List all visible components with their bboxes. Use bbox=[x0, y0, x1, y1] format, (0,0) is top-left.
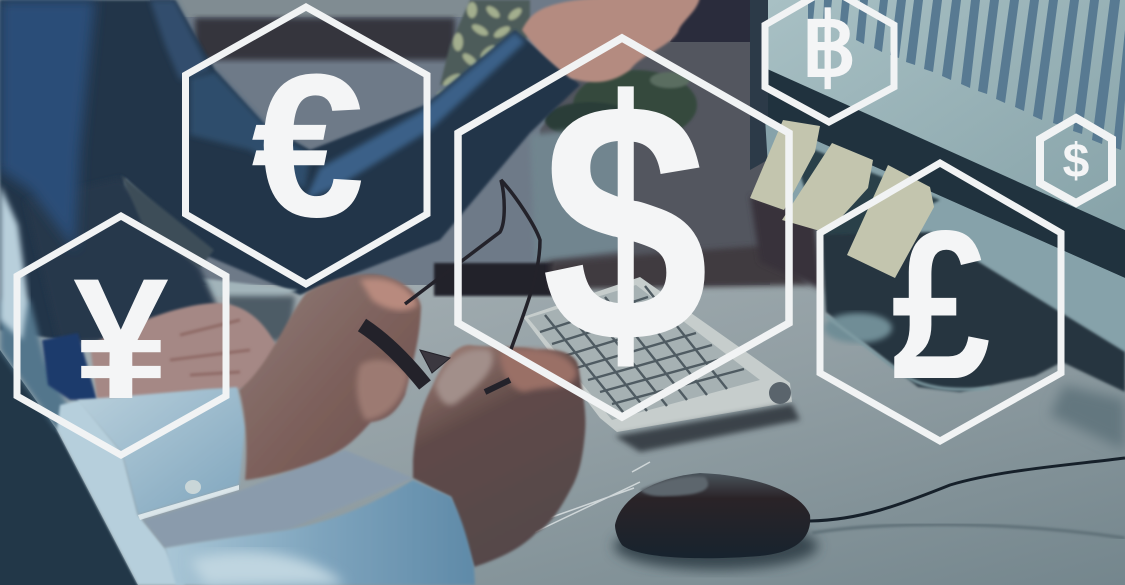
dark hip lower left bbox=[0, 350, 138, 585]
eyeglasses bbox=[362, 180, 540, 392]
grey chair triangle bbox=[121, 175, 214, 268]
small dollar symbol: $ bbox=[1063, 135, 1090, 188]
dark area beneath bezel bbox=[790, 140, 940, 240]
knuckle highlight on central hand bbox=[360, 278, 418, 310]
right desk dark wedge fade bbox=[1050, 385, 1125, 450]
finger shading on left hand bbox=[170, 320, 250, 375]
finger highlights on right hand bbox=[500, 349, 577, 392]
hexagon: pound bbox=[820, 163, 1061, 441]
yen symbol: ¥ bbox=[73, 243, 169, 435]
sweater torso under yen bbox=[25, 178, 230, 345]
hexagon: euro bbox=[186, 7, 427, 284]
fingers on central hand bbox=[357, 360, 408, 420]
monitor glass bbox=[768, 0, 1125, 240]
plant pot bbox=[530, 125, 630, 262]
mouse cable shadow bbox=[812, 525, 1125, 538]
dollar symbol: $ bbox=[541, 32, 709, 414]
wall top strip bbox=[170, 0, 470, 17]
far hand at top bbox=[522, 0, 700, 82]
shirt arm bbox=[0, 185, 28, 340]
sleeve highlight bbox=[190, 552, 345, 585]
keyboard shadow bbox=[615, 404, 800, 452]
area under monitor bbox=[765, 118, 1125, 380]
front sleeve bbox=[165, 480, 475, 585]
dark wall strip at top bbox=[670, 0, 770, 42]
monitor stand shadow bbox=[822, 232, 1125, 392]
dark wall shelf bbox=[195, 18, 455, 60]
wall shadow near notes bbox=[750, 195, 822, 290]
shadowed shelf to the right bbox=[550, 245, 810, 290]
front desk shadow bbox=[143, 450, 413, 548]
hexagon: yen bbox=[17, 216, 226, 455]
shirt cuff bbox=[77, 387, 245, 515]
monitor screen bars bbox=[808, 0, 1125, 150]
plant bbox=[436, 0, 697, 140]
cuff button bbox=[185, 480, 201, 494]
grey wall behind the large dollar bbox=[540, 40, 770, 265]
keyboard keys bbox=[528, 285, 760, 420]
monitor lower bezel bbox=[765, 68, 1125, 278]
hexagon: large dollar bbox=[458, 32, 789, 417]
cuff band bbox=[138, 485, 239, 520]
pound symbol: £ bbox=[891, 187, 991, 423]
hexagon: small dollar bbox=[1040, 118, 1112, 203]
central hand holding glasses bbox=[239, 274, 421, 480]
navy cuff of other arm bbox=[42, 333, 97, 400]
dark table edge bar bbox=[434, 263, 554, 296]
keyboard roller bbox=[769, 382, 791, 404]
dark sweater torso bbox=[0, 0, 580, 340]
desk surface bbox=[0, 270, 1125, 585]
forearm light edge bbox=[305, 32, 525, 200]
monitor left edge bbox=[750, 0, 785, 170]
sticky notes bbox=[750, 120, 934, 278]
monitor stand base highlight bbox=[824, 313, 892, 343]
mouse cable bbox=[810, 458, 1125, 521]
back wall bbox=[150, 0, 770, 285]
shirt sleeve diagonal bbox=[57, 400, 185, 585]
shoulder highlight bbox=[150, 0, 210, 80]
left hand resting bbox=[90, 303, 281, 400]
upper-arm sleeve bbox=[190, 72, 310, 190]
stand base light edge bbox=[826, 316, 990, 389]
computer mouse bbox=[614, 473, 818, 570]
thumb highlight on right hand bbox=[435, 349, 493, 405]
dark desk behind left hand bbox=[225, 296, 295, 345]
blue shadow on shirt bbox=[0, 300, 75, 430]
keyboard body bbox=[523, 277, 792, 432]
euro symbol: € bbox=[251, 32, 365, 260]
right hand bbox=[413, 345, 585, 567]
hexagon: baht / bitcoin bbox=[765, 0, 894, 122]
light desk sliver below the forearm bbox=[200, 278, 298, 300]
papers on the desk bbox=[535, 462, 650, 532]
sweater front highlight bbox=[0, 0, 95, 250]
